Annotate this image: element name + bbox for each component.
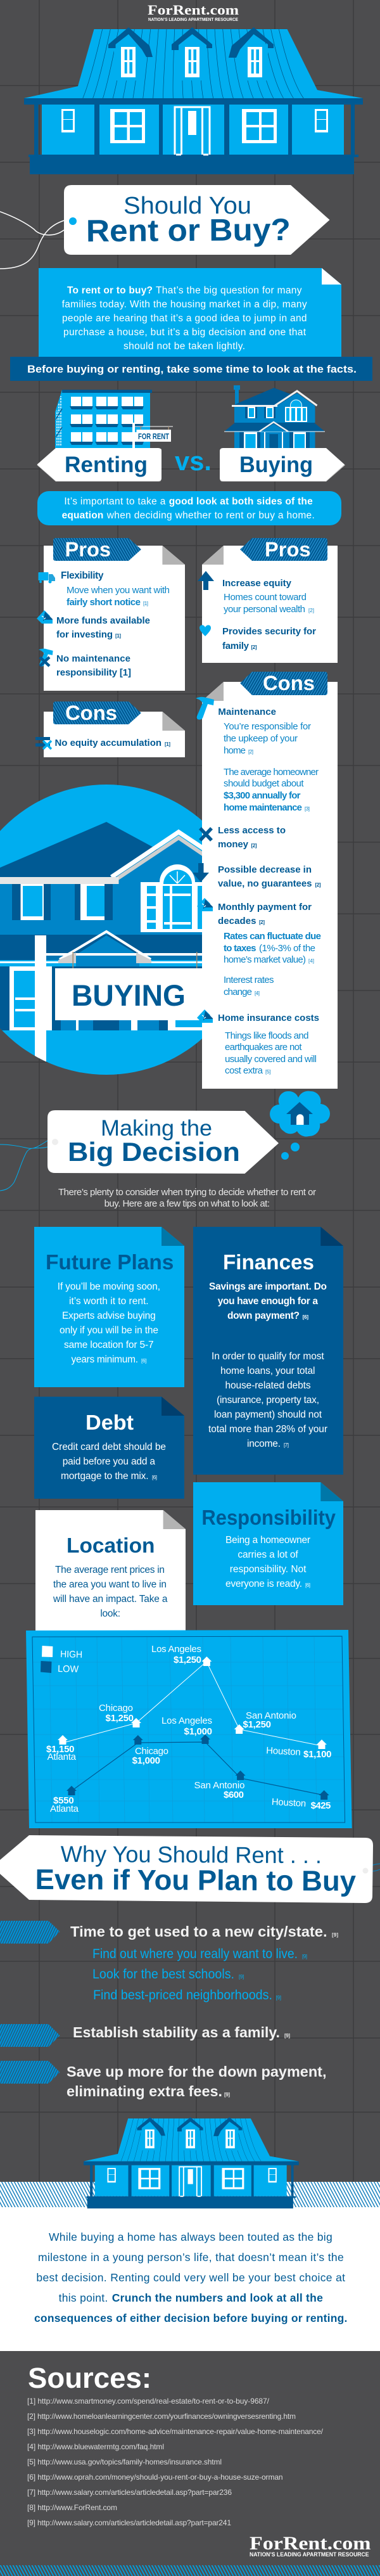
item: security: family: [222, 641, 250, 651]
card: finances: In order to qualify for most: [212, 1351, 324, 1362]
panel: buying cons: [193, 672, 338, 1089]
item: increase equity: your personal wealth: [224, 604, 305, 615]
source list: [3] http://www.houselogic.com/home-advice/maintenance-repair/value-home-maintenance/: [27, 2427, 324, 2436]
source list: [9] http://www.salary.com/articles/articledetail.asp?part=par241: [27, 2518, 231, 2527]
data labels: Houston: [271, 1797, 307, 1809]
illustration: bottom house: [84, 2117, 299, 2208]
item: monthly payment: to taxes: [224, 943, 256, 954]
text: decision intro: buy. Here are a few tips on what to look at:: [104, 1198, 270, 1209]
intro note: That’s the big question for many: [156, 285, 302, 296]
data labels: $1,250: [243, 1719, 271, 1730]
card: location: [35, 1510, 186, 1631]
card: finances: home loans, your total: [220, 1366, 315, 1376]
card: location: look:: [100, 1608, 120, 1619]
data labels: $425: [311, 1800, 331, 1811]
card: responsibility: [6]: [305, 1582, 310, 1588]
item: flexibility: fairly short notice: [66, 597, 141, 608]
text: point two: Establish stability as a family.: [73, 2024, 280, 2041]
text: conclusion: this point.: [59, 2291, 108, 2304]
card: responsibility: everyone is ready.: [225, 1579, 302, 1589]
title tag: making the big decision: Big Decision: [68, 1137, 240, 1167]
card: finances: [7]: [284, 1442, 289, 1448]
banner: look at the facts: [10, 357, 372, 381]
item: flexibility: Move when you want with: [66, 585, 170, 596]
intro note: purchase a house, but it’s a big decision and one that: [63, 327, 307, 338]
text: conclusion: milestone in a young person’s life, that doesn’t mean it’s the: [38, 2251, 344, 2264]
card: future plans: If you’ll be moving soon,: [58, 1281, 160, 1292]
text: point three: [9]: [224, 2092, 230, 2098]
item: no maintenance: [56, 653, 131, 678]
card: responsibility: responsibility. Not: [230, 1564, 307, 1575]
item: maintenance: $3,300 annually for: [224, 790, 301, 801]
item: no maintenance: responsibility [1]: [56, 667, 131, 678]
card: finances: income.: [247, 1439, 281, 1449]
text: point three: eliminating extra fees.: [66, 2083, 222, 2099]
card: finances: down payment?: [227, 1310, 300, 1321]
line: high rents: [58, 1656, 327, 1749]
card: debt: [34, 1397, 184, 1499]
panel: renting cons: [35, 702, 185, 757]
logo: bottom: NATION’S LEADING APARTMENT RESOURCE: [250, 2551, 369, 2558]
item: no equity accumulation: No equity accumulation: [54, 738, 162, 748]
card: finances: total more than 28% of your: [208, 1424, 327, 1435]
data labels: $1,150: [46, 1744, 75, 1755]
item: monthly payment: [4]: [255, 990, 260, 996]
data labels: San Antonio: [246, 1710, 296, 1721]
ribbon: pros: Pros: [265, 538, 310, 561]
arrow: point one: [0, 1921, 60, 1944]
text: point one: [9]: [276, 1995, 281, 2001]
text: vs: vs.: [175, 446, 212, 476]
data labels: Houston: [266, 1745, 301, 1758]
logo: top: [148, 2, 239, 22]
arrow: point two: [0, 2024, 60, 2047]
illustration: small house: [224, 385, 325, 448]
card: responsibility: Being a homeowner: [225, 1535, 310, 1546]
item: monthly payment: (1%-3% of the: [259, 943, 315, 954]
footer stripes: [0, 2565, 380, 2576]
card: finances: Savings are important. Do: [209, 1281, 327, 1292]
panel: renting pros: [37, 538, 185, 691]
item: more funds: More funds available: [56, 615, 150, 626]
ribbon: cons: [53, 702, 141, 724]
item: increase equity: [2]: [308, 608, 314, 613]
item: less access: [218, 825, 286, 850]
item: less access: Less access to: [218, 825, 286, 836]
title tag: should you rent or buy: [0, 185, 329, 269]
text: point one: Find out where you really want to live.: [92, 1946, 298, 1961]
item: maintenance: Maintenance: [218, 707, 276, 717]
item: flexibility: [1]: [143, 601, 148, 606]
title tag: making the big decision: Making the: [101, 1116, 212, 1141]
card: finances: [6]: [303, 1314, 308, 1320]
card: debt: mortgage to the mix.: [61, 1471, 149, 1482]
source list: [1] http://www.smartmoney.com/spend/real-estate/to-rent-or-to-buy-9687/: [27, 2397, 270, 2406]
item: home insurance: cost extra: [225, 1065, 263, 1076]
item: increase equity: Increase equity: [222, 578, 292, 589]
source list: [2] http://www.homeloanlearningcenter.com/yourfinances/owningversesrenting.htm: [27, 2412, 296, 2421]
illustration: apartment building: [55, 390, 173, 448]
text: point three: Save up more for the down payment,: [66, 2063, 327, 2080]
card: finances: (insurance, property tax,: [217, 1395, 319, 1406]
item: home insurance: Things like floods and: [225, 1030, 309, 1041]
icon: money: [37, 610, 53, 624]
text: point one: [9]: [332, 1932, 338, 1938]
title tag: why you should rent: Why You Should Rent . . .: [61, 1841, 322, 1868]
card: finances: you have enough for a: [218, 1296, 318, 1307]
illustration: apartment building: FOR RENT: [138, 432, 169, 441]
icon: x mark: [200, 828, 212, 840]
illustration: top house: [24, 27, 363, 174]
icon: heart: [200, 625, 211, 636]
data labels: [46, 1644, 332, 1814]
data labels: Los Angeles: [162, 1715, 212, 1726]
item: maintenance: [2]: [248, 749, 253, 755]
card: location: The average rent prices in: [55, 1565, 165, 1575]
data labels: $1,250: [174, 1655, 201, 1665]
title tag: should you rent or buy: Rent or Buy?: [86, 213, 291, 248]
card: finances: [193, 1227, 343, 1475]
data labels: $600: [224, 1790, 244, 1800]
card: responsibility: Responsibility: [201, 1506, 336, 1529]
source list: [6] http://www.oprah.com/money/should-you-rent-or-buy-a-house-suze-orman: [27, 2473, 283, 2482]
callout: both sides of the equation: good look at both sides of the: [169, 496, 313, 507]
tag: renting: Renting: [65, 452, 148, 477]
callout: both sides of the equation: [37, 491, 341, 525]
item: monthly payment: [218, 902, 321, 997]
text: point one: [70, 1923, 338, 2002]
banner: look at the facts: Before buying or renting, take some time to look at the facts.: [27, 363, 357, 375]
source list: [8] http://www.ForRent.com: [27, 2503, 117, 2512]
item: monthly payment: [4]: [308, 958, 314, 964]
ground stripes and white closing section: [0, 2182, 380, 2351]
card: responsibility: carries a lot of: [238, 1549, 298, 1560]
item: security: [222, 626, 316, 651]
item: home insurance: usually covered and will: [225, 1054, 317, 1065]
card: debt: Debt: [86, 1411, 134, 1434]
icon: bars with cross: [35, 737, 51, 749]
item: maintenance: [3]: [305, 806, 310, 812]
item: no equity accumulation: [1]: [165, 741, 170, 747]
card: debt: [6]: [152, 1475, 157, 1480]
panel: sources: Sources:: [28, 2362, 151, 2394]
icon: down arrow: [193, 863, 209, 882]
text: conclusion: consequences of either decision before buying or renting.: [34, 2312, 347, 2324]
card: future plans: Future Plans: [46, 1250, 174, 1274]
text: point one: [9]: [302, 1954, 307, 1959]
data labels: Los Angeles: [151, 1644, 201, 1655]
item: monthly payment: Interest rates: [224, 975, 274, 985]
text: point three: [66, 2063, 327, 2099]
intro note: [39, 268, 341, 357]
item: maintenance: home: [224, 745, 246, 756]
data labels: Atlanta: [50, 1804, 79, 1814]
text: decision intro: [58, 1187, 316, 1209]
icon: money: [197, 898, 213, 911]
tag: buying: Buying: [239, 452, 313, 477]
text: conclusion: While buying a home has always been touted as the big: [49, 2231, 332, 2243]
logo: top: ForRent.com: [148, 2, 239, 18]
logo: top: NATION’S LEADING APARTMENT RESOURCE: [148, 18, 238, 22]
source list: [4] http://www.bluewatermtg.com/faq.html: [27, 2442, 164, 2451]
source list: [5] http://www.usa.gov/topics/family-homes/insurance.shtml: [27, 2457, 222, 2466]
item: possible decrease: value, no guarantees: [218, 878, 312, 889]
item: maintenance: the upkeep of your: [224, 733, 298, 744]
item: maintenance: The average homeowner: [224, 767, 319, 778]
legend: LOW: [58, 1663, 79, 1675]
data labels: $1,250: [105, 1713, 134, 1724]
text: point one: Time to get used to a new city/state.: [70, 1923, 327, 1940]
text: point one: [9]: [239, 1974, 244, 1980]
data labels: $1,100: [303, 1749, 332, 1760]
card: finances: house-related debts: [225, 1380, 311, 1391]
item: home insurance: earthquakes are not: [225, 1042, 302, 1053]
logo: bottom: ForRent.com: [250, 2533, 371, 2554]
card: finances: Finances: [223, 1250, 314, 1274]
item: less access: [2]: [251, 843, 257, 849]
text: point one: Look for the best schools.: [92, 1966, 234, 1982]
item: maintenance: You’re responsible for: [224, 721, 311, 732]
data labels: $1,000: [132, 1755, 160, 1766]
item: more funds: [1]: [115, 633, 121, 639]
card: responsibility: [193, 1482, 343, 1605]
item: more funds: [56, 615, 150, 640]
item: monthly payment: decades: [218, 916, 256, 926]
ribbon: pros: [53, 538, 141, 561]
text: decision intro: There’s plenty to consider when trying to decide whether to rent or: [58, 1187, 316, 1198]
item: monthly payment: home’s market value): [224, 954, 306, 965]
ribbon: cons: [240, 672, 327, 695]
card: debt: paid before you add a: [63, 1456, 155, 1467]
item: maintenance: [218, 707, 319, 813]
item: home insurance: [218, 1013, 319, 1076]
card: debt: Credit card debt should be: [52, 1442, 166, 1452]
chart: rent prices by city: [26, 1630, 352, 1828]
panel: sources: [0, 2351, 380, 2565]
item: less access: money: [218, 839, 249, 850]
card: location: will have an impact. Take a: [53, 1594, 168, 1605]
card: location: Location: [66, 1534, 155, 1557]
data labels: $1,000: [184, 1726, 212, 1737]
text: conclusion: [34, 2231, 347, 2324]
tag: buying: [220, 448, 345, 482]
ribbon: pros: Pros: [65, 538, 111, 561]
ribbon: cons: Cons: [65, 702, 117, 724]
item: monthly payment: Monthly payment for: [218, 902, 312, 913]
card: future plans: Experts advise buying: [62, 1310, 156, 1321]
item: more funds: for investing: [56, 629, 113, 640]
icon: thought cloud: [270, 1091, 330, 1160]
ribbon: cons: Cons: [263, 672, 315, 695]
ribbon: pros: [240, 538, 327, 561]
item: home insurance: Home insurance costs: [218, 1013, 319, 1023]
card: location: the area you want to live in: [53, 1579, 167, 1590]
intro note: should not be taken lightly.: [124, 341, 245, 352]
callout: both sides of the equation: when deciding whether to rent or buy a home.: [106, 510, 315, 521]
arrow: point three: [0, 2061, 60, 2084]
tag: renting: [37, 448, 162, 482]
data labels: Chicago: [99, 1703, 133, 1714]
source list: [27, 2397, 324, 2527]
sign: buying: BUYING: [72, 978, 186, 1012]
legend: HIGH: [60, 1649, 82, 1660]
icon: hammer with cross: [39, 649, 53, 667]
intro note: To rent or to buy?: [67, 285, 153, 296]
card: future plans: [34, 1227, 184, 1387]
text: conclusion: best decision. Renting could very well be your best choice at: [36, 2271, 345, 2284]
callout: both sides of the equation: It’s important to take a: [64, 496, 166, 507]
card: finances: loan payment) should not: [214, 1409, 322, 1420]
item: flexibility: [61, 570, 170, 608]
text: conclusion: Crunch the numbers and look at all the: [112, 2291, 323, 2304]
icon: hammer: [196, 697, 214, 720]
card: future plans: same location for 5-7: [64, 1340, 154, 1350]
data labels: Chicago: [135, 1746, 168, 1757]
data labels: Atlanta: [48, 1752, 77, 1762]
data labels: $550: [53, 1795, 74, 1806]
title tag: making the big decision: [0, 1110, 279, 1191]
line: low rents: [66, 1734, 329, 1800]
intro note: people are hearing that it’s a good idea to jump in and: [62, 313, 307, 324]
icon: money: [197, 1009, 213, 1023]
card: future plans: it’s worth it to rent.: [69, 1296, 149, 1307]
item: no maintenance: No maintenance: [56, 653, 130, 664]
item: home insurance: [5]: [265, 1069, 271, 1075]
item: security: [2]: [251, 644, 257, 650]
source list: [7] http://www.salary.com/articles/articledetail.asp?part=par236: [27, 2488, 232, 2497]
item: monthly payment: change: [224, 987, 252, 997]
title tag: why you should rent: Even if You Plan to Buy: [35, 1863, 356, 1897]
intro note: families today. With the housing market in a dip, many: [62, 299, 307, 310]
legend: [41, 1646, 82, 1675]
title tag: why you should rent: [0, 1835, 380, 1903]
item: possible decrease: Possible decrease in: [218, 864, 312, 875]
item: increase equity: Homes count toward: [224, 592, 307, 603]
item: increase equity: [222, 578, 314, 615]
item: flexibility: Flexibility: [61, 570, 104, 581]
data labels: San Antonio: [194, 1780, 244, 1791]
item: security: Provides security for: [222, 626, 316, 637]
item: maintenance: home maintenance: [224, 802, 302, 813]
item: monthly payment: [2]: [259, 920, 265, 925]
callout: both sides of the equation: equation: [62, 510, 103, 521]
icon: truck: [38, 572, 55, 583]
card: future plans: years minimum.: [71, 1354, 138, 1365]
panel: buying pros: [198, 538, 338, 663]
item: monthly payment: Rates can fluctuate due: [224, 931, 321, 942]
illustration: buying house circle: [0, 785, 202, 1075]
item: possible decrease: [218, 864, 321, 889]
text: point one: Find best-priced neighborhoods.: [93, 1987, 272, 2002]
card: future plans: only if you will be in the: [60, 1325, 158, 1336]
item: maintenance: should budget about: [224, 778, 304, 789]
card: future plans: [6]: [141, 1358, 147, 1364]
item: possible decrease: [2]: [315, 882, 321, 888]
title tag: should you rent or buy: Should You: [124, 193, 251, 219]
icon: up arrow: [198, 571, 214, 590]
text: point two: [9]: [284, 2033, 290, 2039]
